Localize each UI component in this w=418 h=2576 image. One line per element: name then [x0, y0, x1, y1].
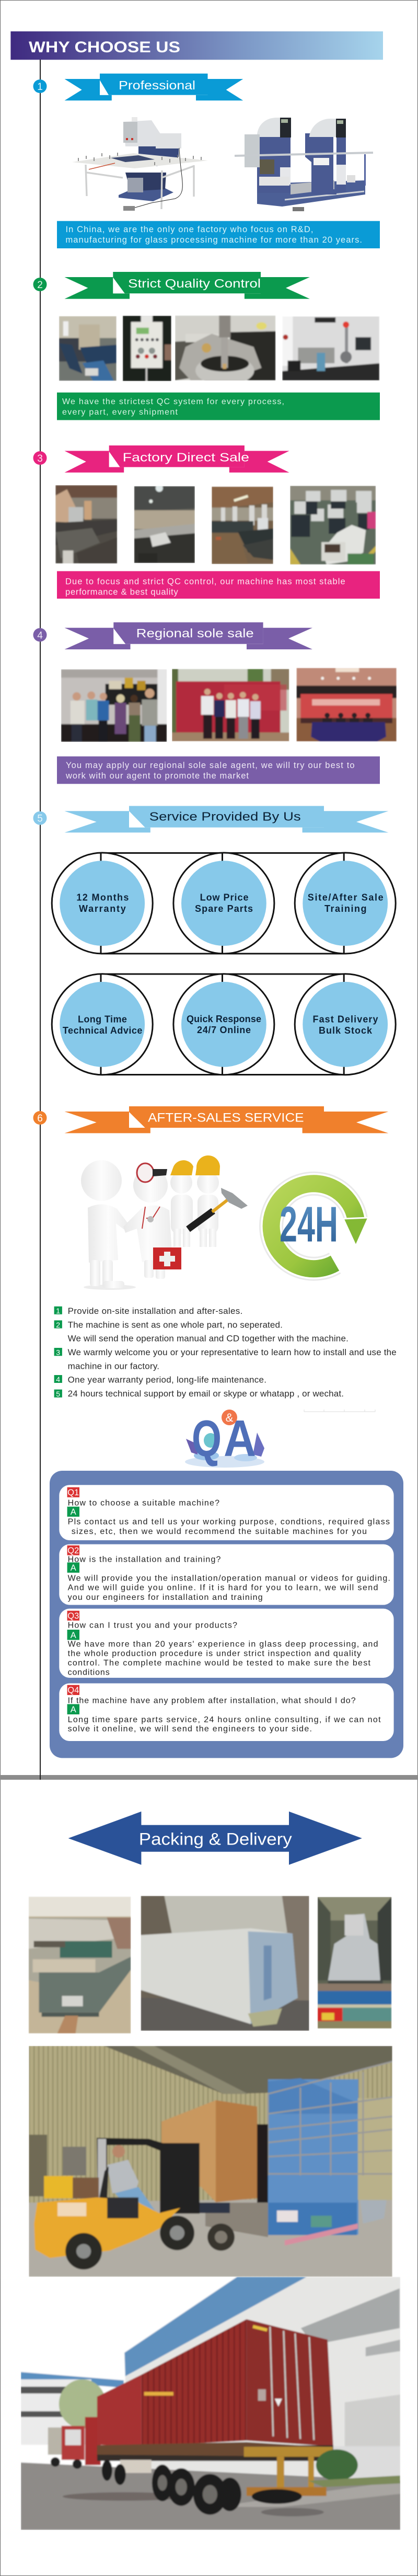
service: fast delivery bulk stock: Bulk Stock [319, 1025, 373, 1036]
badge 6 [33, 1111, 47, 1125]
faq card 2: We will provide you the installation/operation manual or videos for guiding. [68, 1574, 390, 1583]
ribbon heading: professional [65, 74, 243, 100]
photo: drill bit close-up [175, 315, 276, 381]
logo: q and a: & [226, 1411, 234, 1424]
faq card 1 [59, 1485, 394, 1540]
ribbon heading: factory direct sale: Factory Direct Sale [123, 451, 249, 464]
list number 5: 5 [56, 1390, 60, 1398]
photo: mechanical detail [282, 316, 379, 381]
faq card 1: sizes, etc, then we would recommend the suitable machines for you [72, 1527, 367, 1536]
faq card 3: conditions [68, 1668, 110, 1677]
numbered service list: One year warranty period, long-life maintenance. [68, 1375, 266, 1385]
numbered service list: The machine is sent as one whole part, no seperated. [68, 1320, 283, 1330]
text panel: professional: manufacturing for glass processing machine for more than 20 years. [66, 235, 362, 245]
faq card 2: How is the installation and training? [68, 1555, 220, 1564]
ribbon heading: professional: Professional [119, 78, 195, 92]
service: long time technical advice: Long Time [78, 1014, 127, 1024]
faq card 2: Q2 [67, 1546, 79, 1555]
text panel: quality control [57, 393, 380, 420]
badge 4: 4 [37, 630, 43, 641]
faq card 3: A [71, 1631, 76, 1640]
badge 1: 1 [37, 82, 43, 93]
faq card 4: Q4 [67, 1686, 79, 1695]
faq card 3: Q3 [67, 1611, 79, 1621]
icon: 24h service ring: 24H [280, 1197, 338, 1253]
list number 2 [54, 1320, 62, 1329]
faq card 4: Long time spare parts service, 24 hours online consulting, if we can not [68, 1715, 381, 1724]
service: low price spare parts: Spare Parts [195, 903, 253, 914]
text panel: quality control: every part, every shipment [62, 408, 178, 417]
icon: 24h service ring [271, 1184, 368, 1269]
photo: team with customers [61, 669, 167, 742]
faq card 3: We have more than 20 years' experience in glass deep processing, and [68, 1640, 378, 1649]
faq card 2 [59, 1544, 394, 1605]
service: site after sale training: Site/After Sale [308, 892, 384, 902]
photo: assembled machines in workshop [59, 316, 117, 381]
photo: control panel [122, 316, 171, 381]
list number 3: 3 [56, 1348, 60, 1356]
faq card 2: And we will guide you online. If it is hard for you to learn, we will send [68, 1583, 378, 1593]
list number 4 [54, 1375, 62, 1383]
faq card 4: A [71, 1705, 76, 1714]
service: long time technical advice [63, 1014, 142, 1036]
double arrow heading: packing and delivery: Packing & Delivery [139, 1829, 292, 1848]
photo: factory floor 4 [290, 486, 376, 565]
list number 2: 2 [56, 1321, 60, 1329]
service chain: row 1 [52, 852, 396, 954]
service: 12 months warranty [76, 892, 129, 914]
badge 6: 6 [37, 1113, 43, 1124]
product photo: single head drilling machine [72, 117, 208, 211]
text panel: quality control: We have the strictest QC system for every process, [62, 397, 284, 406]
list number 1: 1 [56, 1307, 60, 1315]
logo: q and a: Q [192, 1410, 222, 1467]
faq card 3: the whole production procedure is under strict inspection and quality [68, 1649, 361, 1658]
badge 2: 2 [37, 280, 43, 291]
badge 3 [33, 451, 47, 465]
faq card 4: solve it oneline, we will send the engineers to your side. [68, 1725, 312, 1734]
ribbon heading: after-sales service [65, 1106, 388, 1133]
faq card 3: control. The complete machine would be tested to make sure the best [68, 1659, 371, 1668]
badge 3: 3 [37, 453, 43, 464]
title banner: why choose us: WHY CHOOSE US [29, 39, 180, 56]
photo: factory floor 3 [212, 486, 273, 564]
text panel: professional: In China, we are the only one factory who focus on R&D, [66, 225, 314, 234]
ribbon heading: service provided by us [65, 806, 388, 832]
list number 5 [54, 1390, 62, 1398]
list number 1 [54, 1307, 62, 1315]
list number 4: 4 [56, 1375, 60, 1383]
service: site after sale training [308, 892, 384, 914]
service: quick response online: 24/7 Online [197, 1025, 251, 1035]
service: fast delivery bulk stock [312, 1014, 378, 1036]
photo: pallet wrapped in film [141, 1896, 309, 2031]
photo: machine in container [318, 1897, 392, 2029]
faq card 1: Q1 [67, 1488, 79, 1497]
panel: faq [50, 1471, 403, 1758]
faint ruler marks [304, 1410, 375, 1412]
faq card 3: How can I trust you and your products? [68, 1621, 237, 1630]
ribbon heading: regional sole sale: Regional sole sale [136, 626, 254, 640]
logo: q and a [185, 1410, 264, 1468]
text panel: regional sole sale: work with our agent to promote the market [65, 771, 249, 781]
photo: container truck outside factory [21, 2276, 400, 2530]
text panel: professional [57, 221, 380, 248]
photo: team at red backdrop [172, 669, 289, 741]
faq card 1: How to choose a suitable machine? [68, 1498, 219, 1508]
numbered service list: We will send the operation manual and CD together with the machine. [68, 1334, 349, 1344]
numbered service list: We warmly welcome you or your representative to learn how to install and use the [68, 1347, 397, 1357]
faq card 3 [59, 1609, 394, 1678]
service: long time technical advice: Technical Advice [63, 1025, 142, 1036]
illustration: service people handshake [81, 1155, 248, 1290]
service chain: row 2 [52, 974, 396, 1075]
photo: forklift loading crate [29, 2046, 392, 2277]
service: 12 months warranty: 12 Months [76, 892, 129, 902]
photo: factory floor 1 [55, 485, 117, 564]
text panel: factory direct: performance & best quality [65, 587, 179, 597]
service: low price spare parts: Low Price [200, 892, 249, 902]
ribbon heading: service provided by us: Service Provided By Us [149, 809, 301, 823]
product photo: double head drilling machine [235, 118, 373, 211]
faq card 4 [59, 1684, 394, 1741]
service: quick response online [187, 1014, 261, 1035]
ribbon heading: factory direct sale [65, 445, 289, 473]
photo: signing ceremony [296, 668, 397, 741]
badge 4 [33, 628, 47, 642]
title banner: why choose us [10, 31, 383, 60]
badge 5 [33, 811, 47, 825]
text panel: factory direct [57, 571, 380, 599]
faq card 1: A [71, 1507, 76, 1517]
ribbon heading: strict quality control: Strict Quality Control [128, 277, 261, 290]
service: quick response online: Quick Response [187, 1014, 261, 1024]
logo: q and a: A [224, 1410, 256, 1467]
service: site after sale training: Training [324, 903, 367, 914]
photo: factory floor 2 [134, 486, 195, 563]
faq card 1: Pls contact us and tell us your working purpose, condtions, required glass [68, 1518, 390, 1527]
ribbon heading: after-sales service: AFTER-SALES SERVICE [148, 1110, 304, 1125]
double arrow heading: packing and delivery [68, 1812, 362, 1865]
list number 3 [54, 1348, 62, 1356]
faq card 4: If the machine have any problem after installation, what should I do? [68, 1697, 356, 1705]
numbered service list: machine in our factory. [68, 1361, 159, 1371]
text panel: regional sole sale: You may apply our regional sole sale agent, we will try our best to [66, 761, 355, 770]
photo: wrapped machine [28, 1897, 131, 2034]
badge 1 [33, 79, 47, 93]
text panel: factory direct: Due to focus and strict QC control, our machine has most stable [65, 577, 345, 587]
badge 2 [33, 278, 47, 291]
numbered service list [54, 1306, 397, 1399]
service: fast delivery bulk stock: Fast Delivery [312, 1014, 378, 1024]
ribbon heading: regional sole sale [65, 622, 312, 649]
badge 5: 5 [37, 814, 43, 825]
faq card 2: you our engineers for installation and training [68, 1593, 263, 1602]
numbered service list: Provide on-site installation and after-sales. [68, 1306, 242, 1316]
service: low price spare parts [195, 892, 253, 914]
section divider bar [0, 1775, 418, 1780]
timeline vertical line [40, 60, 41, 1780]
text panel: regional sole sale [57, 757, 380, 784]
service: 12 months warranty: Warranty [79, 903, 126, 914]
numbered service list: 24 hours technical support by email or skype or whatapp , or wechat. [68, 1389, 344, 1399]
faq card 2: A [71, 1563, 76, 1573]
ribbon heading: strict quality control [65, 272, 310, 299]
